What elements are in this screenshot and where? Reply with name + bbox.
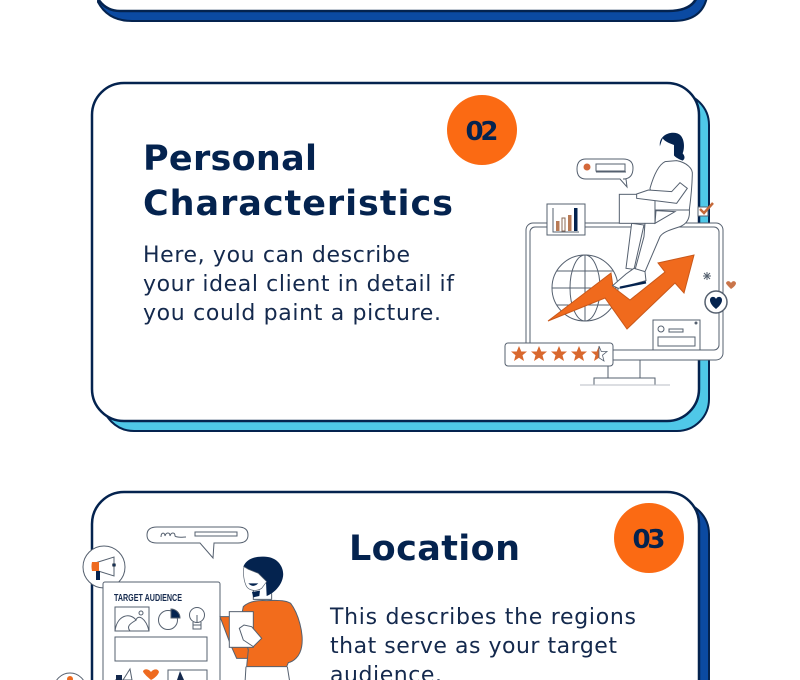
face [659, 138, 674, 158]
icon: heart badge [705, 291, 727, 313]
person on monitor [613, 133, 692, 288]
text block: description: you could paint a picture. [143, 301, 441, 326]
neck [253, 590, 272, 599]
heading: Location: Location [349, 529, 520, 569]
text block: description [143, 243, 455, 326]
icon: megaphone badge [83, 546, 125, 588]
text block: location description [329, 605, 636, 680]
number badge 02 [447, 95, 517, 165]
mouth [248, 583, 258, 586]
arm [220, 617, 262, 658]
speech bubble [577, 159, 633, 187]
heading: Personal Characteristics: Characteristics [143, 184, 453, 224]
target audience board: TARGET AUDIENCE [114, 593, 182, 604]
text block: location description: that serve as your target [330, 634, 617, 659]
icon: person badge [54, 673, 86, 680]
face [243, 567, 267, 590]
panel: top card (cropped) [92, 0, 708, 21]
number badge 02: 02 [466, 117, 498, 147]
heading: Personal Characteristics [143, 139, 453, 224]
number badge 03: 03 [632, 525, 666, 555]
icon: small heart [726, 281, 736, 289]
legs [245, 667, 290, 680]
tablet [229, 612, 253, 647]
text block: location description: This describes the regions [329, 605, 636, 630]
shoes [613, 268, 646, 288]
speech bubble [147, 527, 248, 558]
chin beard [252, 591, 260, 597]
legs [626, 223, 644, 269]
icon: globe [552, 255, 618, 321]
monitor [526, 223, 723, 385]
target audience board [103, 582, 220, 680]
growth arrow [548, 255, 694, 329]
number badge 03 [614, 503, 684, 573]
text block: description: Here, you can describe [143, 243, 410, 268]
icon: asterisk [703, 272, 711, 280]
heading: Personal Characteristics: Personal [143, 139, 317, 179]
hair [660, 133, 685, 161]
rating stars [505, 343, 613, 366]
small window [653, 320, 700, 350]
torso [240, 600, 302, 667]
person with tablet [220, 557, 302, 680]
laptop [655, 211, 675, 223]
hand [239, 625, 262, 647]
arm [637, 183, 687, 203]
panel: location card [92, 492, 709, 680]
illustration: target audience board and person [54, 527, 302, 680]
torso [650, 161, 692, 210]
panel: personal characteristics card [92, 83, 709, 431]
illustration: monitor with person and growth arrow [505, 133, 736, 385]
icon: check mark [698, 203, 713, 216]
hair [243, 557, 283, 596]
icon: bar chart [547, 204, 585, 235]
text block: description: your ideal client in detail if [143, 272, 455, 297]
